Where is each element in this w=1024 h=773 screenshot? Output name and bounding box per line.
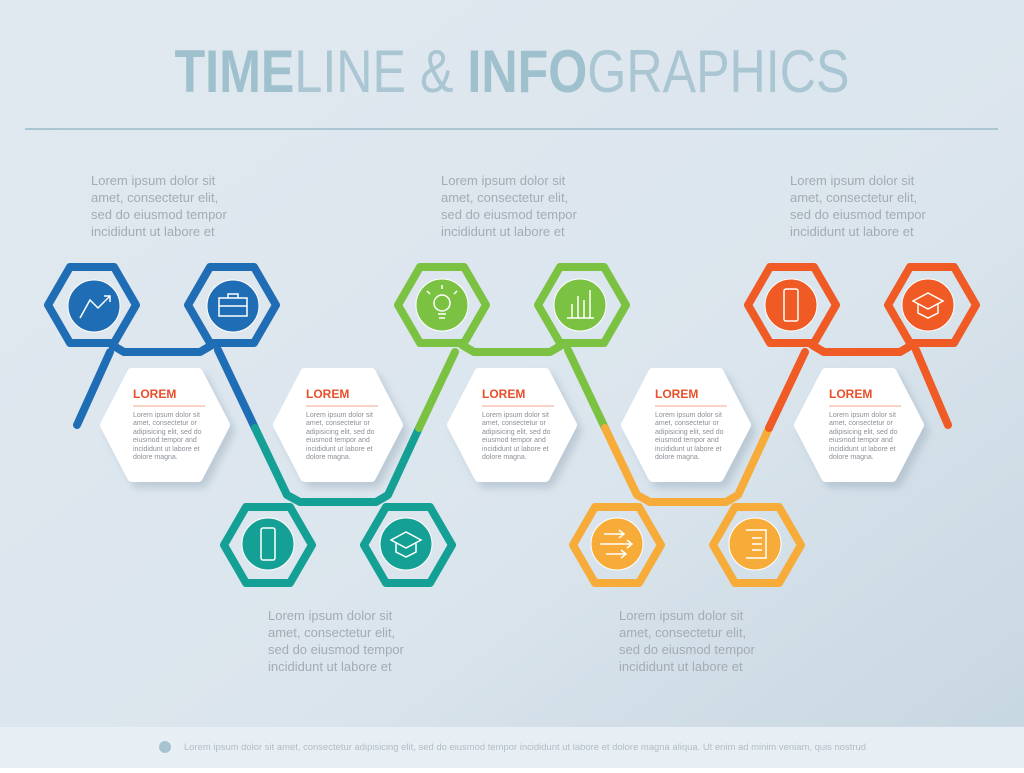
card 2: Lorem ipsum dolor sit <box>306 412 373 419</box>
text block: bottom 1: incididunt ut labore et <box>268 659 392 674</box>
text block: top 2: sed do eiusmod tempor <box>441 207 578 222</box>
icon: light bulb <box>416 279 468 331</box>
footer <box>0 727 1024 768</box>
card 3: LOREM <box>482 387 525 401</box>
text block: bottom 1 <box>268 608 405 674</box>
card 3: Lorem ipsum dolor sit <box>482 412 549 419</box>
card 2: LOREM <box>306 387 349 401</box>
card 1: incididunt ut labore et <box>133 446 200 453</box>
card 3: amet, consectetur or <box>482 420 546 427</box>
text block: top 2: amet, consectetur elit, <box>441 190 568 205</box>
icon: briefcase <box>207 280 259 332</box>
text block: top 1: sed do eiusmod tempor <box>91 207 228 222</box>
card 2 <box>278 373 398 477</box>
text block: top 1: amet, consectetur elit, <box>91 190 218 205</box>
card 5 <box>799 373 919 477</box>
card 1: amet, consectetur or <box>133 420 197 427</box>
timeline path <box>48 267 976 583</box>
card 5: dolore magna. <box>829 454 874 461</box>
card 5: eiusmod tempor and <box>829 437 893 444</box>
card 3: incididunt ut labore et <box>482 446 549 453</box>
card 2: dolore magna. <box>306 454 351 461</box>
icon: graduation cap teal <box>380 518 432 570</box>
card 2: incididunt ut labore et <box>306 446 373 453</box>
text block: top 3: Lorem ipsum dolor sit <box>790 173 915 188</box>
card 1: adipisicing elit, sed do <box>133 429 202 436</box>
footer: Lorem ipsum dolor sit amet, consectetur adipisicing elit, sed do eiusmod tempor incididunt ut labore et dolore magna aliqua. Ut enim ad minim veniam, quis nostrud <box>184 742 866 752</box>
text block: top 2 <box>441 173 578 239</box>
card 2: adipisicing elit, sed do <box>306 429 375 436</box>
card 4: incididunt ut labore et <box>655 446 722 453</box>
text block: top 3 <box>790 173 927 239</box>
text block: top 3: incididunt ut labore et <box>790 224 914 239</box>
card 1: eiusmod tempor and <box>133 437 197 444</box>
text block: top 3: amet, consectetur elit, <box>790 190 917 205</box>
text block: bottom 1: sed do eiusmod tempor <box>268 642 405 657</box>
card 5: adipisicing elit, sed do <box>829 429 898 436</box>
text block: bottom 1: Lorem ipsum dolor sit <box>268 608 393 623</box>
icon: chart arrow <box>68 280 120 332</box>
card 4: LOREM <box>655 387 698 401</box>
card 1: LOREM <box>133 387 176 401</box>
text block: top 1: Lorem ipsum dolor sit <box>91 173 216 188</box>
text block: bottom 2: Lorem ipsum dolor sit <box>619 608 744 623</box>
text block: top 2: Lorem ipsum dolor sit <box>441 173 566 188</box>
card 1 <box>105 373 225 477</box>
text block: bottom 2 <box>619 608 756 674</box>
card 3: adipisicing elit, sed do <box>482 429 551 436</box>
card 4: eiusmod tempor and <box>655 437 719 444</box>
icon: bar chart <box>554 279 606 331</box>
title: TIMELINE & INFOGRAPHICS <box>174 38 850 105</box>
card 5: LOREM <box>829 387 872 401</box>
card 2: amet, consectetur or <box>306 420 370 427</box>
icon: arrows <box>591 518 643 570</box>
text block: top 2: incididunt ut labore et <box>441 224 565 239</box>
card 3 <box>452 373 572 477</box>
icon: phone teal <box>242 518 294 570</box>
card 4: adipisicing elit, sed do <box>655 429 724 436</box>
card 5: Lorem ipsum dolor sit <box>829 412 896 419</box>
card 2: eiusmod tempor and <box>306 437 370 444</box>
text block: top 1 <box>91 173 228 239</box>
card 3: eiusmod tempor and <box>482 437 546 444</box>
card 1: dolore magna. <box>133 454 178 461</box>
card 3: dolore magna. <box>482 454 527 461</box>
card 5: incididunt ut labore et <box>829 446 896 453</box>
card 4 <box>626 373 746 477</box>
icon: graduation cap red <box>902 279 954 331</box>
text block: top 1: incididunt ut labore et <box>91 224 215 239</box>
text block: bottom 1: amet, consectetur elit, <box>268 625 395 640</box>
text block: bottom 2: incididunt ut labore et <box>619 659 743 674</box>
text block: bottom 2: sed do eiusmod tempor <box>619 642 756 657</box>
text block: top 3: sed do eiusmod tempor <box>790 207 927 222</box>
card 1: Lorem ipsum dolor sit <box>133 412 200 419</box>
card 4: dolore magna. <box>655 454 700 461</box>
card 4: Lorem ipsum dolor sit <box>655 412 722 419</box>
card 4: amet, consectetur or <box>655 420 719 427</box>
text block: bottom 2: amet, consectetur elit, <box>619 625 746 640</box>
card 5: amet, consectetur or <box>829 420 893 427</box>
icon: document <box>729 518 781 570</box>
icon: phone red <box>765 279 817 331</box>
